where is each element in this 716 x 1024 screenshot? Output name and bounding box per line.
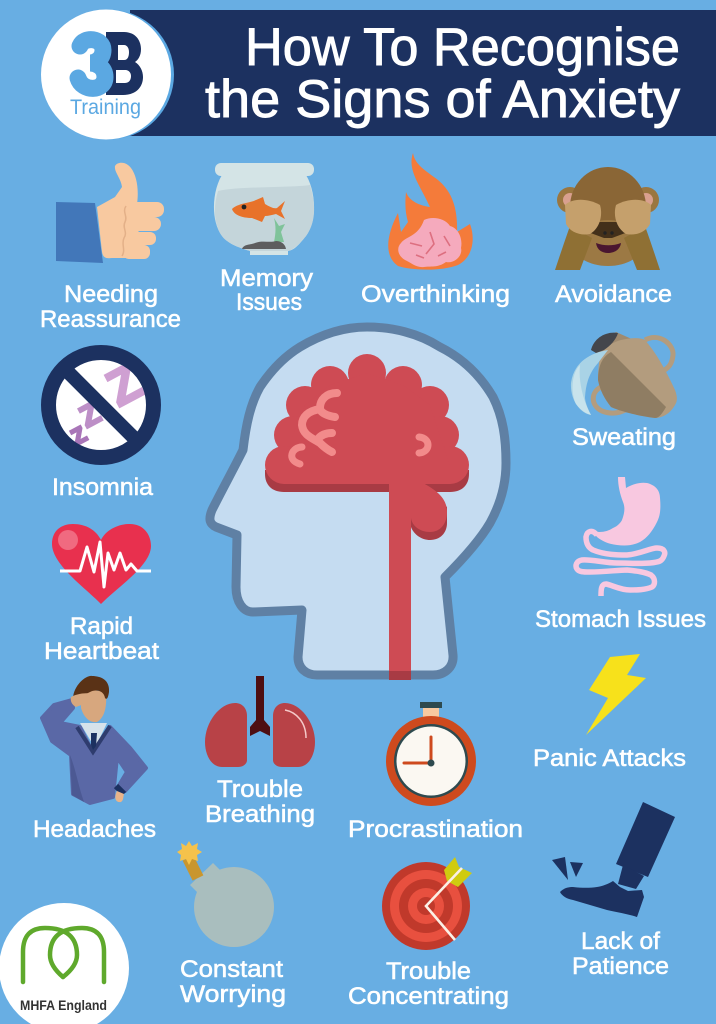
- panel: trouble breathing: [205, 676, 315, 828]
- brain: [265, 354, 469, 680]
- label: Sweating: [572, 424, 676, 451]
- label: Worrying: [180, 981, 286, 1008]
- label: [180, 956, 286, 1008]
- icon: tapping foot: [552, 802, 675, 917]
- label: Panic Attacks: [533, 745, 686, 772]
- title: the Signs of Anxiety: [205, 70, 681, 129]
- label: Patience: [572, 953, 669, 980]
- label: Memory: [220, 265, 313, 292]
- label: Concentrating: [348, 983, 509, 1010]
- head outline: [210, 327, 506, 675]
- panel: constant worrying: [177, 841, 286, 1008]
- icon: man holding head: [42, 676, 146, 803]
- icon: stopwatch: [386, 702, 476, 806]
- icon: heart with pulse: [52, 524, 151, 604]
- logo: MHFA England: MHFA England: [20, 998, 107, 1013]
- label: Overthinking: [361, 281, 510, 308]
- panel: lack of patience: [552, 802, 675, 980]
- panel: procrastination: [348, 702, 523, 843]
- label: Issues: [236, 289, 302, 316]
- panel: overthinking: [361, 153, 510, 308]
- panel: avoidance: [555, 167, 672, 308]
- panel: headaches: [33, 676, 156, 843]
- label: Trouble: [217, 776, 303, 803]
- icon: no sleep sign: [48, 352, 154, 458]
- label: Stomach Issues: [535, 606, 706, 633]
- label: [44, 613, 159, 665]
- label: Breathing: [205, 801, 315, 828]
- icon: no sleep sign: Z: [67, 421, 91, 450]
- logo: MHFA England: [0, 903, 129, 1024]
- label: [572, 928, 669, 980]
- panel: memory issues: [214, 163, 314, 316]
- panel: rapid heartbeat: [44, 524, 159, 665]
- icon: pouring jug: [571, 332, 677, 418]
- icon: stomach and intestines: [576, 477, 665, 596]
- label: Constant: [180, 956, 283, 983]
- label: Rapid: [70, 613, 133, 640]
- label: Heartbeat: [44, 638, 159, 665]
- icon: monkey covering eyes: [555, 167, 660, 270]
- icon: thumbs up: [56, 163, 164, 263]
- icon: lightning bolt: [586, 654, 646, 735]
- illustration: head with brain: [210, 327, 506, 680]
- icon: flaming brain: [388, 153, 473, 270]
- panel: stomach issues: [535, 477, 706, 633]
- label: Insomnia: [52, 474, 154, 501]
- icon: bomb: [177, 841, 274, 947]
- label: Avoidance: [555, 281, 672, 308]
- label: Reassurance: [40, 306, 181, 333]
- logo: 3B Training: [41, 10, 174, 140]
- icon: no sleep sign: Z: [97, 353, 151, 417]
- panel: panic attacks: [533, 654, 686, 772]
- title: How To Recognise: [245, 18, 680, 77]
- label: Lack of: [581, 928, 660, 955]
- header banner: [130, 10, 716, 136]
- panel: needing reassurance: [40, 163, 181, 333]
- label: Trouble: [386, 958, 471, 985]
- label: [205, 776, 315, 828]
- label: [40, 281, 181, 333]
- label: [348, 958, 509, 1010]
- logo: 3B Training: Training: [70, 96, 141, 119]
- icon: fish bowl: [214, 163, 314, 255]
- title: [205, 18, 681, 129]
- label: Procrastination: [348, 816, 523, 843]
- icon: lungs: [205, 676, 315, 767]
- label: Headaches: [33, 816, 156, 843]
- panel: trouble concentrating: [348, 857, 509, 1010]
- panel: sweating: [571, 332, 677, 451]
- icon: no sleep sign: Z: [74, 397, 106, 434]
- icon: target with arrow: [382, 857, 472, 950]
- label: Needing: [64, 281, 158, 308]
- panel: insomnia: [48, 352, 154, 501]
- label: [220, 265, 313, 316]
